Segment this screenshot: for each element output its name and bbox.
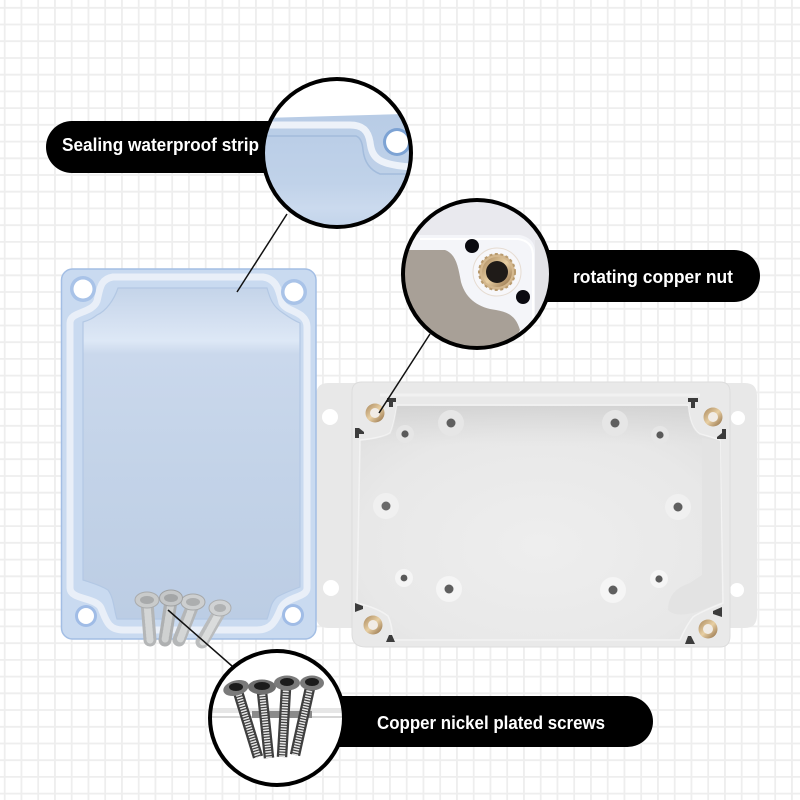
label: copper nickel plated screws: Copper nickel plated screws (377, 712, 605, 733)
magnifier: copper nut (401, 198, 550, 350)
leader line: copper nut (379, 334, 430, 413)
magnifier: screws (210, 651, 344, 785)
screw 1 (222, 677, 258, 757)
transparent lid (62, 269, 316, 639)
base body (352, 382, 730, 647)
magnified corner detail (405, 235, 535, 346)
screw 1 (135, 592, 159, 640)
magnifier background (403, 200, 551, 348)
magnifier ring (403, 200, 551, 348)
magnifier ring (263, 79, 411, 227)
sealing strip (70, 277, 307, 630)
callout pill: copper nickel plated screws (300, 696, 653, 747)
cavity rim highlight (380, 394, 700, 396)
screw 2 (160, 590, 182, 640)
enclosure base (316, 382, 757, 647)
label: sealing waterproof strip: Sealing waterproof strip (62, 134, 259, 155)
magnified screws detail (210, 676, 344, 758)
lid inner panel (83, 288, 300, 619)
label: rotating copper nut: rotating copper nut (573, 266, 733, 287)
magnifier: sealing strip (264, 77, 413, 229)
corner copper nuts (364, 404, 722, 638)
callout pill: rotating copper nut (490, 250, 760, 302)
magnifier background (210, 651, 344, 785)
dark corner clips (355, 398, 726, 644)
magnifier ring (210, 651, 344, 785)
leader line: screws (168, 610, 232, 666)
magnified lid detail (265, 114, 409, 225)
magnifier background (263, 79, 411, 227)
screw 3 (274, 676, 300, 757)
cavity top shading (360, 406, 720, 520)
callout pill: sealing waterproof strip (46, 121, 306, 173)
screw 3 (179, 594, 205, 640)
screw 2 (248, 680, 276, 758)
flange mounting holes (322, 409, 745, 597)
lid outer shell (62, 269, 316, 639)
base cavity (357, 405, 723, 640)
screw 4 (202, 600, 231, 642)
lid screw holes (70, 276, 307, 627)
base mounting flanges (316, 383, 757, 628)
cavity right wall shading (668, 438, 722, 615)
leader line: sealing strip (237, 214, 287, 292)
mounting posts (373, 410, 691, 603)
screw 4 (295, 676, 324, 755)
loose screws on lid (135, 590, 231, 642)
